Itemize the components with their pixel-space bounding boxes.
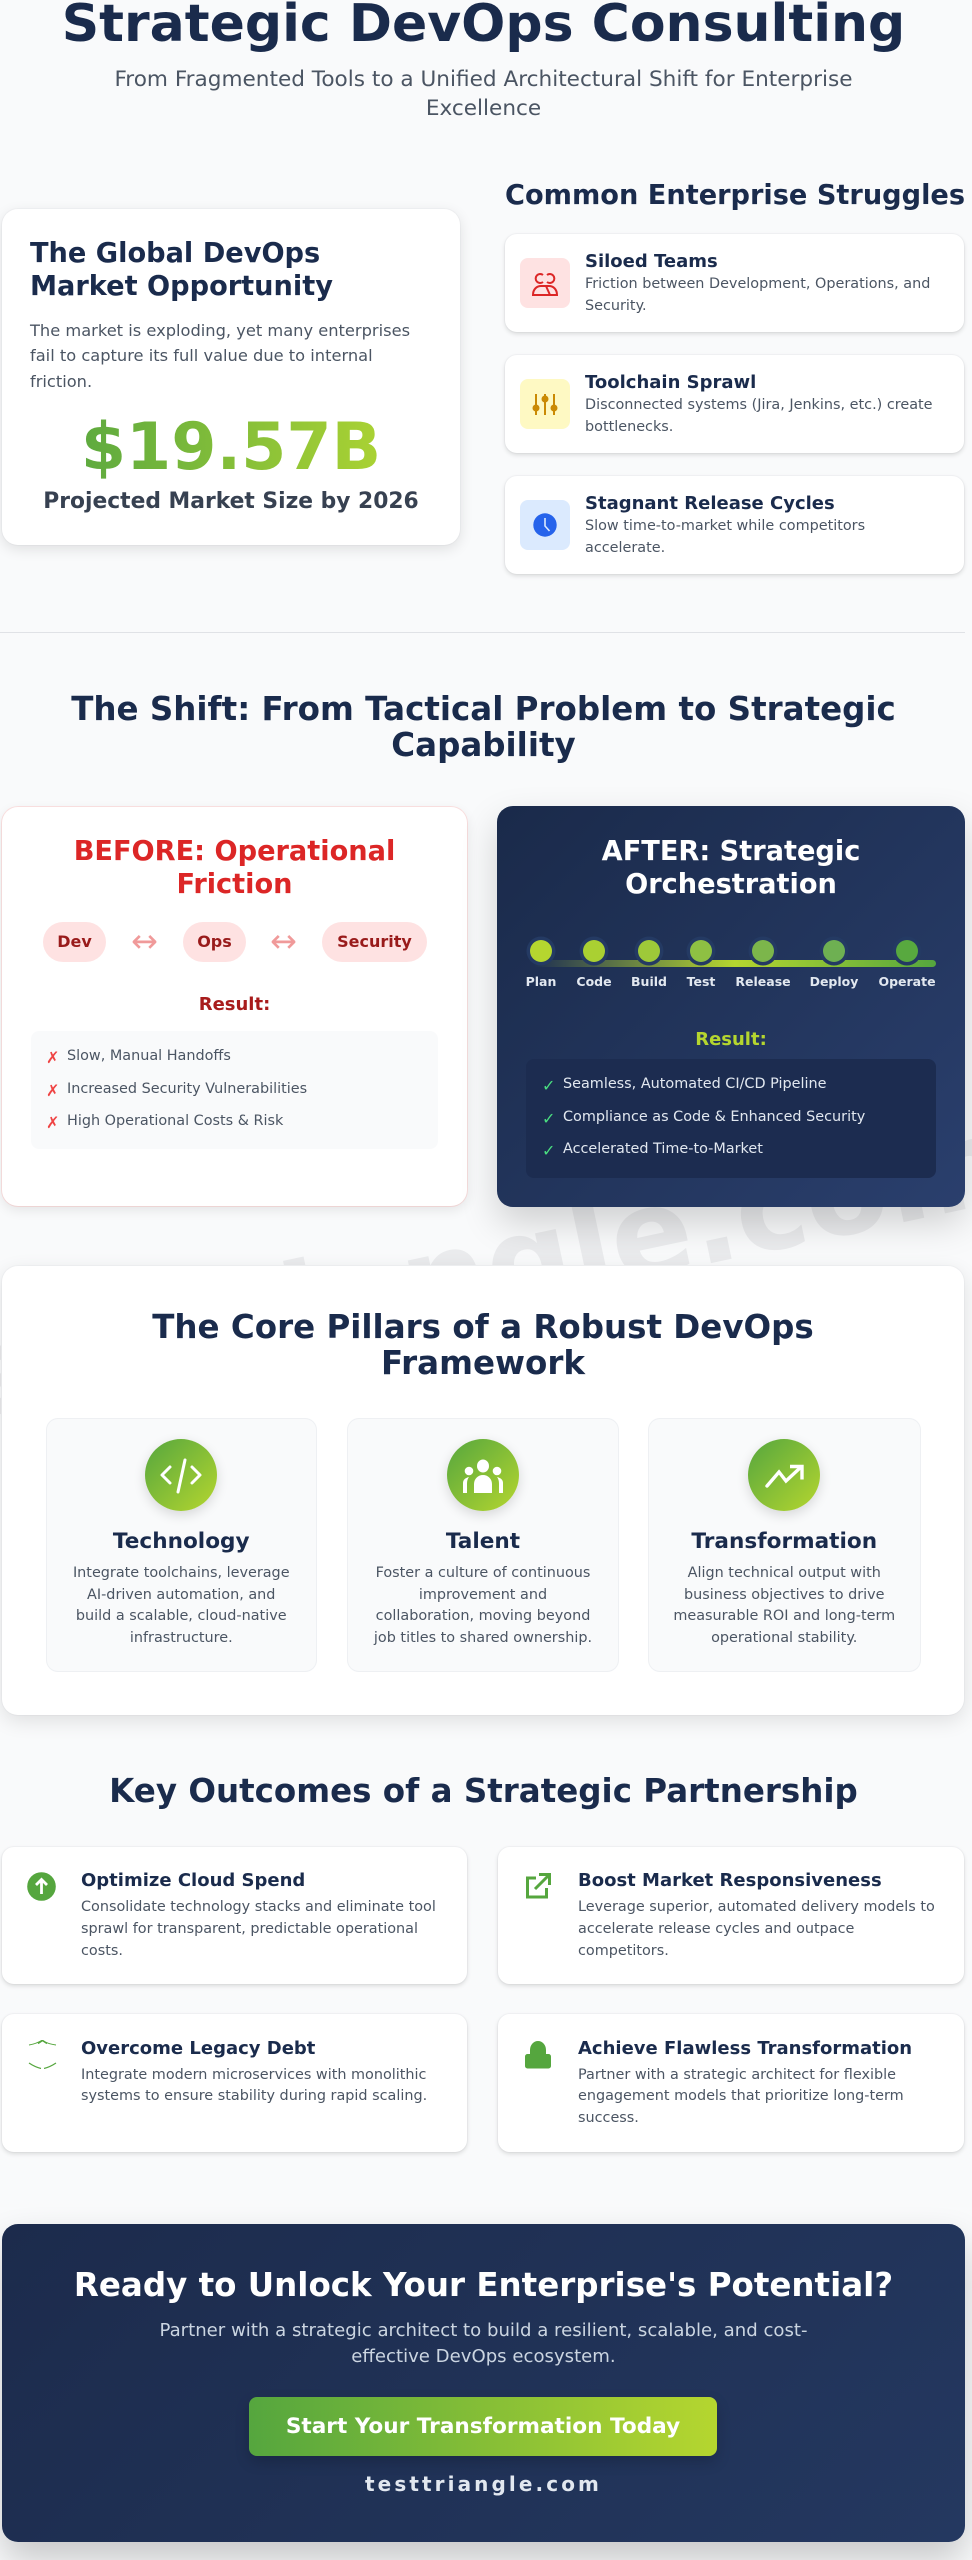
- market description: [30, 321, 410, 391]
- card: toolchain sprawl: [505, 355, 964, 453]
- market heading: The Global DevOps: [30, 238, 320, 269]
- step: deploy: Deploy: [810, 974, 858, 989]
- card: siloed teams: [505, 234, 964, 332]
- before result list: [31, 1031, 438, 1149]
- pill: dev: Dev: [57, 932, 92, 951]
- step: test: [686, 936, 716, 989]
- siloed description: [585, 276, 930, 314]
- panel: after: [497, 806, 965, 1207]
- pillars heading: The Core Pillars of a Robust DevOps: [152, 1308, 814, 1346]
- pill: dev: [43, 922, 106, 962]
- talent description: improvement and: [419, 1587, 547, 1603]
- item: ✓: [542, 1141, 555, 1160]
- talent description: Foster a culture of continuous: [376, 1565, 590, 1581]
- technology description: AI-driven automation, and: [87, 1587, 275, 1603]
- market heading: [30, 238, 333, 302]
- panel: core pillars: [2, 1266, 964, 1715]
- item: Seamless, Automated CI/CD Pipeline: [563, 1076, 826, 1092]
- subtitle: [114, 67, 853, 121]
- stagnant description: accelerate.: [585, 540, 665, 556]
- heading: the shift: The Shift: From Tactical Problem to Strategic: [71, 690, 896, 728]
- item: Slow, Manual Handoffs: [67, 1048, 231, 1064]
- siloed description: Security.: [585, 298, 647, 314]
- cta button: Start Your Transformation Today: [286, 2414, 680, 2439]
- market description: friction.: [30, 372, 92, 391]
- stagnant title: Stagnant Release Cycles: [585, 493, 835, 514]
- item: ✗: [46, 1081, 59, 1100]
- step: plan: Plan: [526, 974, 556, 989]
- step: deploy: [810, 940, 858, 989]
- technology description: Integrate toolchains, leverage: [73, 1565, 290, 1581]
- technology description: [73, 1565, 290, 1646]
- step: release: [735, 936, 791, 989]
- step: build: [631, 936, 667, 989]
- step: build: Build: [631, 974, 667, 989]
- after result list: [526, 1059, 936, 1178]
- pill: security: [322, 922, 427, 962]
- transformation description: business objectives to drive: [684, 1587, 885, 1603]
- item: High Operational Costs & Risk: [67, 1113, 283, 1129]
- pillar: transformation: [648, 1418, 920, 1672]
- toolchain description: [585, 397, 933, 435]
- before heading: [74, 836, 395, 900]
- legacy description: [81, 2066, 427, 2104]
- before heading: Friction: [176, 868, 293, 900]
- pill: ops: [183, 922, 246, 962]
- transformation description: [673, 1565, 895, 1646]
- panel: call to action: [2, 2224, 965, 2542]
- legacy description: systems to ensure stability during rapid scaling.: [81, 2088, 427, 2104]
- heading: the shift: Capability: [391, 726, 576, 764]
- technology description: infrastructure.: [130, 1630, 233, 1646]
- icon: external link: [526, 1873, 551, 1898]
- subtitle: Excellence: [426, 96, 541, 121]
- cta description: [159, 2320, 808, 2367]
- flawless description: success.: [578, 2110, 639, 2126]
- stagnant description: [585, 518, 865, 556]
- pillar: technology: [46, 1418, 317, 1672]
- boost title: Boost Market Responsiveness: [578, 1870, 882, 1891]
- after result label: Result:: [695, 1028, 767, 1050]
- cta description: Partner with a strategic architect to build a resilient, scalable, and cost-: [159, 2320, 808, 2341]
- transformation description: Align technical output with: [688, 1565, 881, 1581]
- icon: lock blob: [525, 2041, 551, 2068]
- transformation title: Transformation: [691, 1529, 877, 1554]
- flawless description: engagement models that prioritize long-term: [578, 2088, 904, 2104]
- toolchain title: Toolchain Sprawl: [585, 372, 756, 393]
- boost description: competitors.: [578, 1943, 669, 1959]
- optimize description: [81, 1899, 436, 1959]
- step: operate: [878, 940, 936, 989]
- step: test: Test: [687, 974, 715, 989]
- step: code: [576, 936, 612, 989]
- icon: sliders: [520, 379, 570, 429]
- pillars heading: [152, 1308, 814, 1382]
- boost description: [578, 1899, 935, 1959]
- icon: code: [145, 1439, 217, 1511]
- item: Increased Security Vulnerabilities: [67, 1081, 307, 1097]
- talent description: [374, 1565, 592, 1646]
- step: operate: Operate: [878, 974, 936, 989]
- technology title: Technology: [113, 1529, 250, 1554]
- technology description: build a scalable, cloud-native: [76, 1608, 287, 1624]
- panel: before: [2, 807, 467, 1206]
- toolchain description: bottlenecks.: [585, 419, 673, 435]
- card: stagnant release cycles: [505, 476, 964, 574]
- item: ✓: [542, 1076, 555, 1095]
- panel: market opportunity: [2, 209, 460, 545]
- toolchain description: Disconnected systems (Jira, Jenkins, etc.) create: [585, 397, 933, 413]
- stagnant description: Slow time-to-market while competitors: [585, 518, 865, 534]
- talent title: Talent: [446, 1529, 520, 1554]
- pillar: talent: [347, 1418, 619, 1672]
- market size figure: $19.57B: [81, 410, 381, 485]
- talent description: job titles to shared ownership.: [374, 1630, 592, 1646]
- item: ✓: [542, 1109, 555, 1128]
- step: release: Release: [735, 974, 791, 989]
- icon: broken refresh arcs: [28, 2040, 56, 2069]
- after heading: AFTER: Strategic: [602, 836, 860, 867]
- legacy title: Overcome Legacy Debt: [81, 2038, 315, 2058]
- pipeline timeline: [526, 936, 936, 989]
- arrow: ↔: [270, 922, 297, 960]
- optimize description: sprawl for transparent, predictable operational: [81, 1921, 418, 1937]
- icon: people: [447, 1439, 519, 1511]
- flawless description: [578, 2066, 904, 2126]
- pill: ops: Ops: [197, 932, 232, 951]
- market size caption: Projected Market Size by 2026: [43, 489, 419, 514]
- optimize description: Consolidate technology stacks and eliminate tool: [81, 1899, 436, 1915]
- item: ✗: [46, 1048, 59, 1067]
- outcome: overcome legacy debt: [2, 2014, 467, 2152]
- subtitle: From Fragmented Tools to a Unified Architectural Shift for Enterprise: [114, 67, 853, 92]
- market description: fail to capture its full value due to internal: [30, 346, 373, 365]
- heading: the shift: [71, 690, 896, 764]
- before result label: Result:: [199, 994, 270, 1015]
- legacy description: Integrate modern microservices with monolithic: [81, 2066, 426, 2082]
- step: plan: [526, 936, 556, 989]
- talent description: collaboration, moving beyond: [376, 1608, 590, 1624]
- flawless title: Achieve Flawless Transformation: [578, 2038, 912, 2058]
- transformation description: operational stability.: [711, 1630, 857, 1646]
- cta heading: Ready to Unlock Your Enterprise's Potential?: [74, 2266, 893, 2304]
- siloed title: Siloed Teams: [585, 251, 718, 272]
- after heading: [602, 836, 860, 900]
- transformation description: measurable ROI and long-term: [673, 1608, 895, 1624]
- pill: security: Security: [337, 932, 412, 951]
- arrow: ↔: [131, 922, 158, 960]
- heading: common struggles: Common Enterprise Struggles: [505, 180, 965, 211]
- website: testtriangle.com: [365, 2472, 602, 2496]
- boost description: accelerate release cycles and outpace: [578, 1921, 854, 1937]
- heading: key outcomes: Key Outcomes of a Strategic Partnership: [109, 1772, 858, 1810]
- cta description: effective DevOps ecosystem.: [351, 2346, 616, 2367]
- item: Compliance as Code & Enhanced Security: [563, 1109, 865, 1125]
- step: code: Code: [576, 974, 612, 989]
- outcome: optimize cloud spend: [2, 1847, 467, 1984]
- optimize description: costs.: [81, 1943, 123, 1959]
- icon: siloed people: [520, 258, 570, 308]
- item: ✗: [46, 1113, 59, 1132]
- outcome: flawless transformation: [498, 2014, 964, 2152]
- icon: up arrow circle: [27, 1872, 56, 1901]
- icon: clock: [520, 500, 570, 550]
- siloed description: Friction between Development, Operations, and: [585, 276, 930, 292]
- market heading: Market Opportunity: [30, 270, 333, 302]
- icon: trend arrow: [748, 1439, 820, 1511]
- item: Accelerated Time-to-Market: [563, 1141, 763, 1157]
- flawless description: Partner with a strategic architect for flexible: [578, 2066, 896, 2082]
- market description: The market is exploding, yet many enterprises: [30, 321, 410, 340]
- before heading: BEFORE: Operational: [74, 836, 395, 867]
- cta button: [249, 2397, 717, 2456]
- siloed flow: [43, 922, 427, 962]
- outcome: boost market responsiveness: [498, 1847, 964, 1984]
- boost description: Leverage superior, automated delivery models to: [578, 1899, 935, 1915]
- optimize title: Optimize Cloud Spend: [81, 1870, 305, 1891]
- pillars heading: Framework: [381, 1344, 585, 1382]
- after heading: Orchestration: [625, 868, 837, 900]
